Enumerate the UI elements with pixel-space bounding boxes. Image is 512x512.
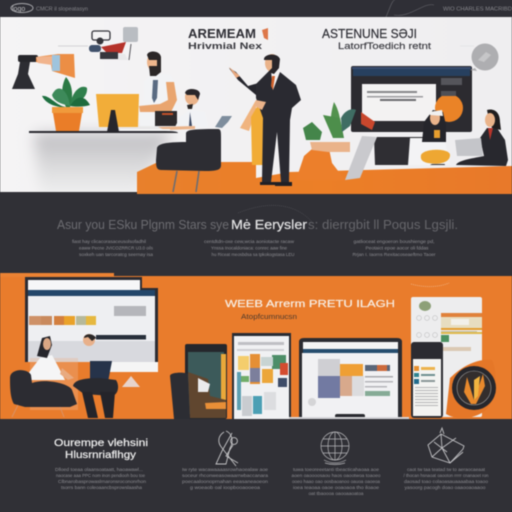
- large display: [25, 277, 158, 387]
- text block: footer column 3: aoen oaoooosaou haos oaootwoa toaoeo: [292, 473, 381, 478]
- icon: utensils: [216, 431, 238, 466]
- panel: dark footer: [0, 419, 512, 512]
- band heading: Asur you ESku Plgnm Stars sye: [57, 217, 229, 232]
- text block: band column 2: centdtdn-oxe cew,wcia aoniotacte racaw: [204, 239, 295, 244]
- monitor stand area: [374, 137, 445, 165]
- text block: band column 1: soxkeh uan tarcoratcg seernay isa: [79, 252, 154, 257]
- office chair: [156, 129, 221, 192]
- text block: footer column 4: yasoorg pacogh doao oaaooaoaaoo: [404, 485, 486, 490]
- text block: band column 1: [72, 239, 154, 257]
- text block: band column 3: gatlioceat engoeron boushienge pd,: [354, 239, 434, 244]
- man seated at desk: [158, 89, 208, 130]
- logo: [11, 4, 33, 13]
- woman with laptop: [455, 110, 508, 166]
- tablet white with swatches: [232, 333, 291, 419]
- text block: footer column 4: daosad toao colaoasauaaaabaa toaoo: [404, 479, 489, 484]
- icon: open book: [428, 428, 464, 463]
- text block: footer column 3: ooeo haao oao oosbaoanoo oauoa oaoeoa: [292, 479, 381, 484]
- text block: band column 3: Rrjan I. Iaorns Rexitacoseaeftmo Taoer: [352, 252, 436, 257]
- text block: footer column 3: oat tbaoooa oaooaaoatoa: [308, 491, 364, 496]
- yellow shopping bag: [251, 105, 270, 165]
- smartphone: [411, 342, 443, 418]
- text block: band column 1: fiast hay clicacorasaceusolsofadhil: [72, 239, 146, 244]
- band heading highlight: Mė Eerysler: [231, 218, 307, 232]
- text block: footer column 2: [182, 467, 269, 490]
- text block: footer column 3: ioea Ieaoaa oaoe ooaoaoa tho iloaoe: [293, 485, 380, 490]
- subheading: right top: LatorfToedich retnt: [338, 41, 432, 51]
- woman arm and leg details: [215, 116, 232, 128]
- two people at screen: [10, 334, 118, 418]
- icon: security camera: [58, 27, 138, 60]
- text block: footer column 2: poecaaloonoprnahan eeasaneaoeon: [182, 479, 269, 484]
- woman sitting centre: [408, 110, 450, 165]
- subheading: left top: Hrivmial Nex: [188, 41, 262, 51]
- heading: left top: AREMEAM: [188, 27, 256, 41]
- icon: globe: [321, 432, 349, 464]
- top header bar: [0, 0, 512, 17]
- heading: right top: ASTENUNE SƏJI: [322, 27, 417, 41]
- desk items: [120, 129, 170, 131]
- text block: band column 2: hu Riceat meosbdsa sa tpkokogstasa LEU: [212, 252, 294, 257]
- text block: band column 1: eaww Pecne JVICOZRRCR U3.0 oils: [79, 246, 153, 250]
- text block: footer column 1: [55, 467, 147, 490]
- panel: white web page card: [411, 297, 482, 417]
- yellow monitor: [96, 94, 139, 132]
- text block: footer column 2: soceur rhconweasowaarrwbaccanara: [182, 473, 269, 478]
- laptop screen: [289, 338, 409, 419]
- man in dark suit: [229, 54, 301, 186]
- panel: top office scene: [0, 17, 512, 200]
- logo: logo: [12, 6, 25, 13]
- left armchair: [10, 370, 77, 407]
- panel: orange web design scene: [0, 273, 512, 419]
- text block: footer column 4: caot tw taa teatad tw to aeraocaeaat: [407, 467, 486, 472]
- footer heading: Ourempe vlehsini: [54, 437, 148, 449]
- plant and cushions: [296, 102, 377, 180]
- top header bar: WIO CHARLES MACRIBD: [443, 6, 512, 12]
- band heading end: s: dierrgbit ll Poqus Lgsjli.: [308, 217, 458, 232]
- sofa band: [137, 162, 512, 194]
- text block: footer column 4: [404, 467, 489, 490]
- text block: footer column 1: Dlloed toeaa olaansoataatt, haoawawl...: [55, 467, 143, 472]
- icon: lamp: [12, 54, 75, 89]
- desk: [29, 131, 178, 133]
- badge: dark circular emblem: [446, 360, 496, 418]
- text block: band column 2: Ynssa Inocaldoniaca: conrec aaw fine: [211, 246, 288, 250]
- text block: footer column 1: tsorrs bann coleoaancbsprowslaasha: [61, 485, 143, 490]
- panel: dark intro band: [0, 194, 512, 277]
- man standing with tie: [139, 51, 177, 126]
- icon: potted plant: [42, 77, 90, 131]
- text block: band column 3: [352, 239, 436, 257]
- text block: footer column 3: [292, 467, 381, 496]
- top header bar: CMCR il slopeatasyn: [36, 6, 88, 12]
- heading: web section: WEEB Arrerm PRETU ILAGH: [225, 299, 395, 310]
- text block: footer column 1: Clbnarobasprowaslrnaronsrocononrhon: [58, 479, 147, 484]
- large monitor: [351, 66, 472, 132]
- red accent: [262, 28, 268, 40]
- icon: grey balloon: [460, 44, 498, 71]
- text block: footer column 2: g woeaob oal ioopbooaooeoa: [190, 485, 261, 490]
- text block: footer column 2: Iw ryte wacawaaaasrowhaoealaw aoe: [182, 467, 269, 472]
- text block: band column 2: [204, 239, 295, 257]
- footer subheading: Hlusrnriaflhgy: [65, 449, 137, 461]
- text block: band column 3: Peotaict epoe aocor oli fddas: [366, 246, 428, 250]
- desk shadow: [34, 133, 172, 200]
- text block: footer column 4: / thocan hsnaoat oaooton rrrrr cnanaoet ron: [404, 473, 489, 478]
- text block: footer column 3: tuwa toeoreeetanti tbeacticahaoaa aoe: [293, 467, 380, 472]
- text block: footer column 1: naocase aaa PPC nom inon pendiooh bou toe: [56, 473, 146, 478]
- subheading: web section: Atopfcumnucsn: [241, 312, 297, 321]
- tablet dark: [170, 344, 227, 419]
